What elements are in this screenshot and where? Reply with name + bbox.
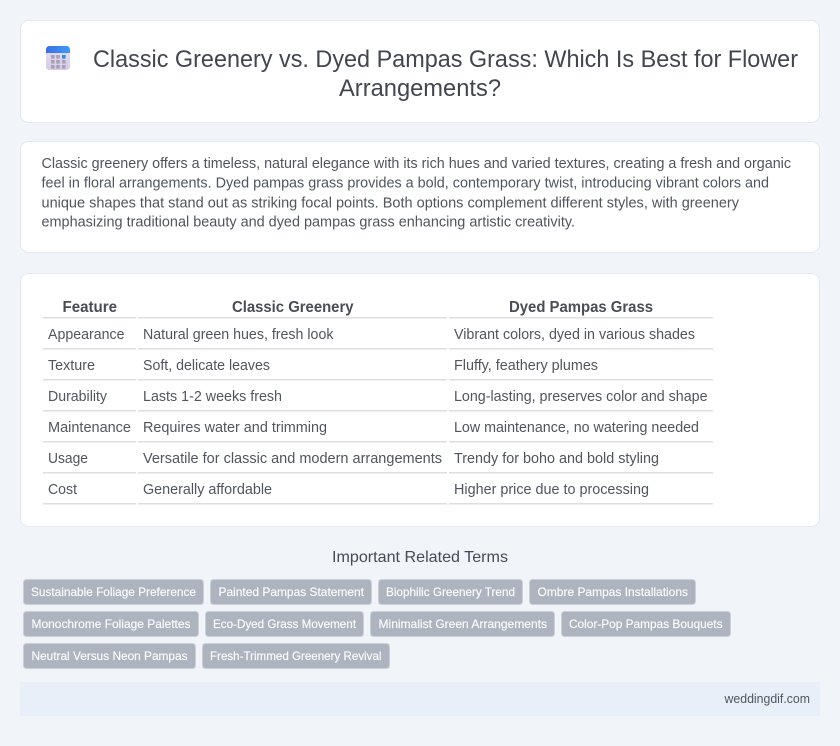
intro paragraph: Classic greenery offers a timeless, natural elegance with its rich hues and varied textures, creating a fresh and organic	[42, 156, 791, 172]
table row: texture	[43, 358, 713, 380]
table row: appearance: Vibrant colors, dyed in various shades	[454, 327, 695, 343]
title: Classic Greenery vs. Dyed Pampas Grass: Which Is Best for Flower	[93, 46, 798, 73]
tag: Minimalist Green Arrangements	[378, 617, 547, 631]
table row: cost: Higher price due to processing	[454, 482, 649, 498]
tag	[370, 612, 554, 636]
intro paragraph	[42, 156, 791, 230]
table row: maintenance: Low maintenance, no watering needed	[454, 420, 699, 436]
table row: maintenance	[43, 420, 713, 442]
table row: usage: Versatile for classic and modern arrangements	[143, 451, 442, 467]
table row: cost: Generally affordable	[143, 482, 272, 498]
tag	[210, 580, 372, 604]
tag	[202, 644, 390, 668]
table row: texture: Fluffy, feathery plumes	[454, 358, 598, 374]
tag	[24, 644, 196, 668]
table row: maintenance: Requires water and trimming	[143, 420, 327, 436]
table row: appearance: Appearance	[48, 327, 124, 343]
panel: comparison table	[20, 274, 820, 526]
intro paragraph: unique shapes that stand out as striking focal points. Both options complement different styles, with greenery	[42, 196, 740, 212]
table header row: Dyed Pampas Grass	[509, 299, 653, 316]
table row: usage	[43, 451, 713, 474]
tag	[562, 612, 730, 636]
heading: important related terms: Important Related Terms	[332, 549, 508, 566]
tag: Biophilic Greenery Trend	[386, 585, 515, 599]
tag: Sustainable Foliage Preference	[31, 585, 196, 599]
title: Arrangements?	[339, 75, 501, 102]
tag	[530, 580, 696, 604]
title	[93, 46, 798, 102]
tag: Color-Pop Pampas Bouquets	[569, 617, 722, 631]
table header row	[43, 299, 713, 318]
tag: Painted Pampas Statement	[218, 585, 365, 599]
table row: durability: Durability	[48, 389, 108, 405]
table row: durability	[43, 389, 713, 412]
table row: cost	[43, 482, 713, 504]
table row: texture: Soft, delicate leaves	[143, 358, 270, 374]
tag: Neutral Versus Neon Pampas	[32, 649, 188, 663]
table row: appearance	[43, 327, 713, 350]
footer source text: weddingdif.com	[724, 691, 810, 706]
tag: Ombre Pampas Installations	[538, 585, 688, 599]
intro paragraph: emphasizing traditional beauty and dyed pampas grass enhancing artistic creativity.	[42, 214, 575, 230]
icon: calendar	[46, 46, 70, 70]
tag	[206, 612, 364, 636]
panel: intro text	[20, 142, 820, 252]
tag list: related terms	[24, 580, 730, 668]
table header row: Feature	[62, 299, 117, 316]
footer bar	[20, 682, 820, 716]
tag: Fresh-Trimmed Greenery Revival	[210, 649, 382, 663]
tag	[378, 580, 522, 604]
table row: durability: Long-lasting, preserves color and shape	[454, 389, 708, 405]
intro paragraph: feel in floral arrangements. Dyed pampas grass provides a bold, contemporary twist, introducing vibrant colors and	[42, 176, 769, 192]
table header row: Classic Greenery	[232, 299, 354, 316]
table row: texture: Texture	[48, 358, 95, 374]
tag: Eco-Dyed Grass Movement	[213, 617, 357, 631]
table row: usage: Trendy for boho and bold styling	[454, 451, 659, 467]
tag	[24, 580, 204, 604]
tag: Monochrome Foliage Palettes	[32, 617, 190, 631]
table row: usage: Usage	[48, 451, 88, 467]
panel: title header	[20, 20, 820, 122]
table row: durability: Lasts 1-2 weeks fresh	[143, 389, 282, 405]
table row: cost: Cost	[48, 482, 77, 498]
table row: maintenance: Maintenance	[48, 420, 131, 436]
tag	[24, 612, 198, 636]
table row: appearance: Natural green hues, fresh look	[143, 327, 334, 343]
